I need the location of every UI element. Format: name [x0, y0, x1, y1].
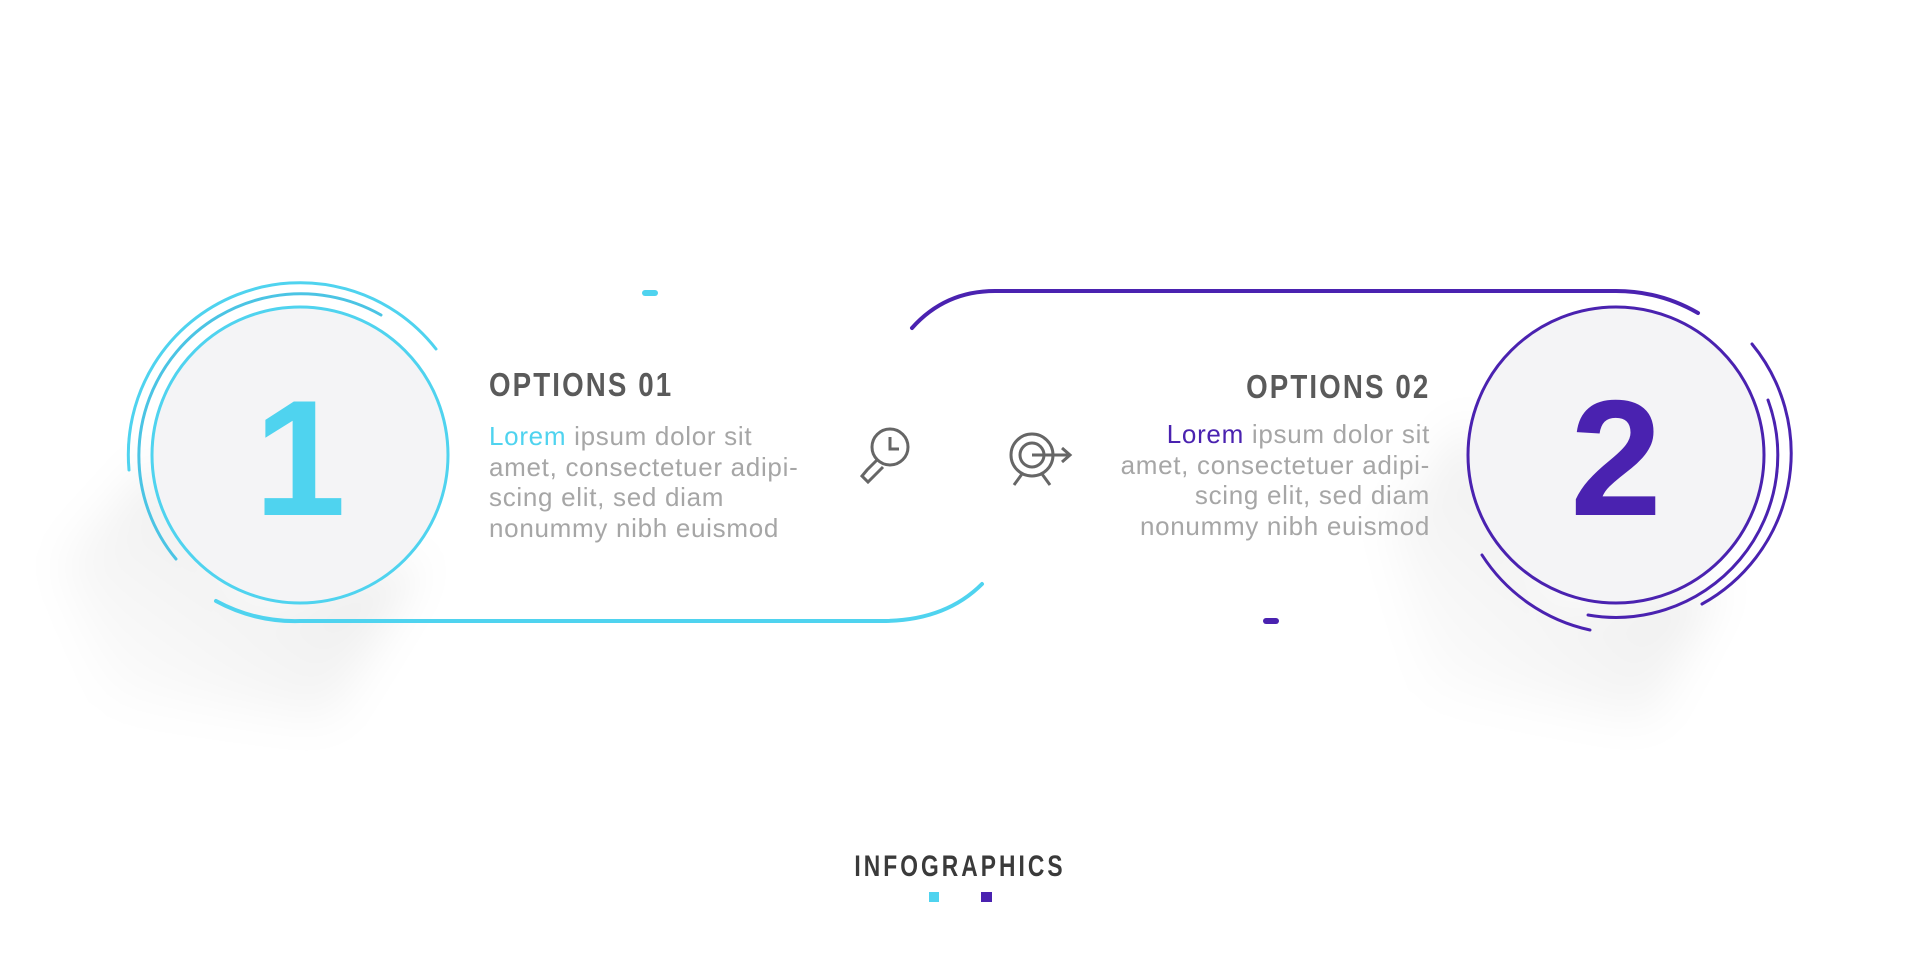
text block 1: scing elit, sed diam	[489, 482, 724, 512]
number 1: 1	[254, 366, 346, 550]
dash purple	[1263, 618, 1279, 624]
heading: options 02: OPTIONS 02	[1246, 368, 1430, 405]
connector line purple	[912, 291, 1698, 328]
text block 2: scing elit, sed diam	[1195, 480, 1430, 510]
circle 1	[128, 283, 982, 621]
footer title: INFOGRAPHICS	[854, 850, 1066, 883]
text block 2: Lorem ipsum dolor sit	[1167, 419, 1430, 449]
footer squares	[929, 892, 939, 902]
shadow: circle 1	[60, 460, 420, 720]
text block 2: amet, consectetuer adipi-	[1121, 450, 1430, 480]
circle 2	[912, 291, 1791, 630]
text block 1: nonummy nibh euismod	[489, 513, 779, 543]
connector line cyan	[216, 584, 982, 621]
heading: options 01: OPTIONS 01	[489, 366, 673, 403]
icon: target	[1011, 434, 1070, 485]
number 2: 2	[1570, 366, 1662, 550]
dash cyan	[642, 290, 658, 296]
text block 1: Lorem ipsum dolor sit	[489, 421, 752, 451]
icon: magnifier clock	[862, 429, 908, 482]
text block 2	[1121, 419, 1430, 541]
text block 1	[489, 421, 798, 543]
text block 2: nonummy nibh euismod	[1140, 511, 1430, 541]
shadow: circle 2	[1390, 420, 1720, 720]
text block 1: amet, consectetuer adipi-	[489, 452, 798, 482]
